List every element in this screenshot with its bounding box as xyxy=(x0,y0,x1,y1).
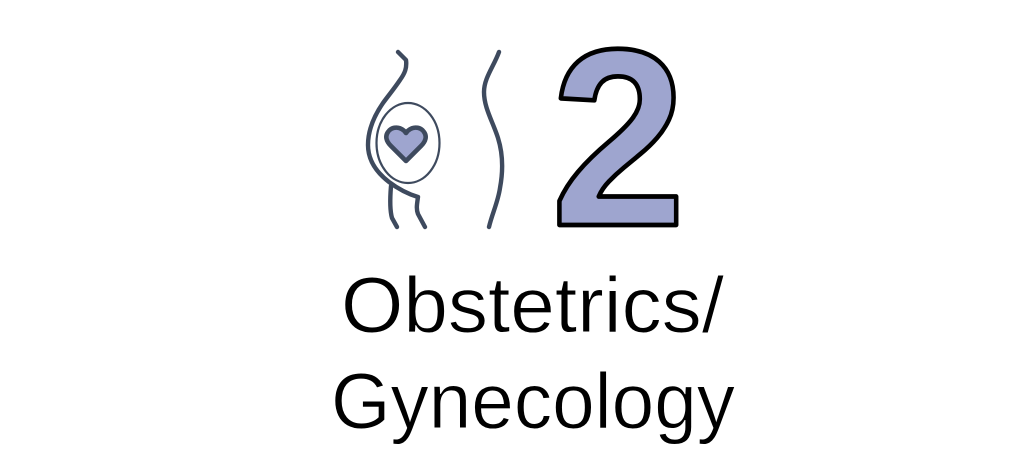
title line 2: Gynecology xyxy=(331,356,735,445)
title line 1: Obstetrics/ xyxy=(341,260,724,349)
left leg xyxy=(390,186,397,227)
womb circle xyxy=(376,103,440,183)
back outline xyxy=(484,52,502,227)
title xyxy=(331,260,735,445)
number 2: 2 xyxy=(551,0,686,279)
belly and front body outline xyxy=(368,52,425,227)
icon: pregnant body with fetal heart xyxy=(368,52,502,227)
heart xyxy=(386,128,426,161)
